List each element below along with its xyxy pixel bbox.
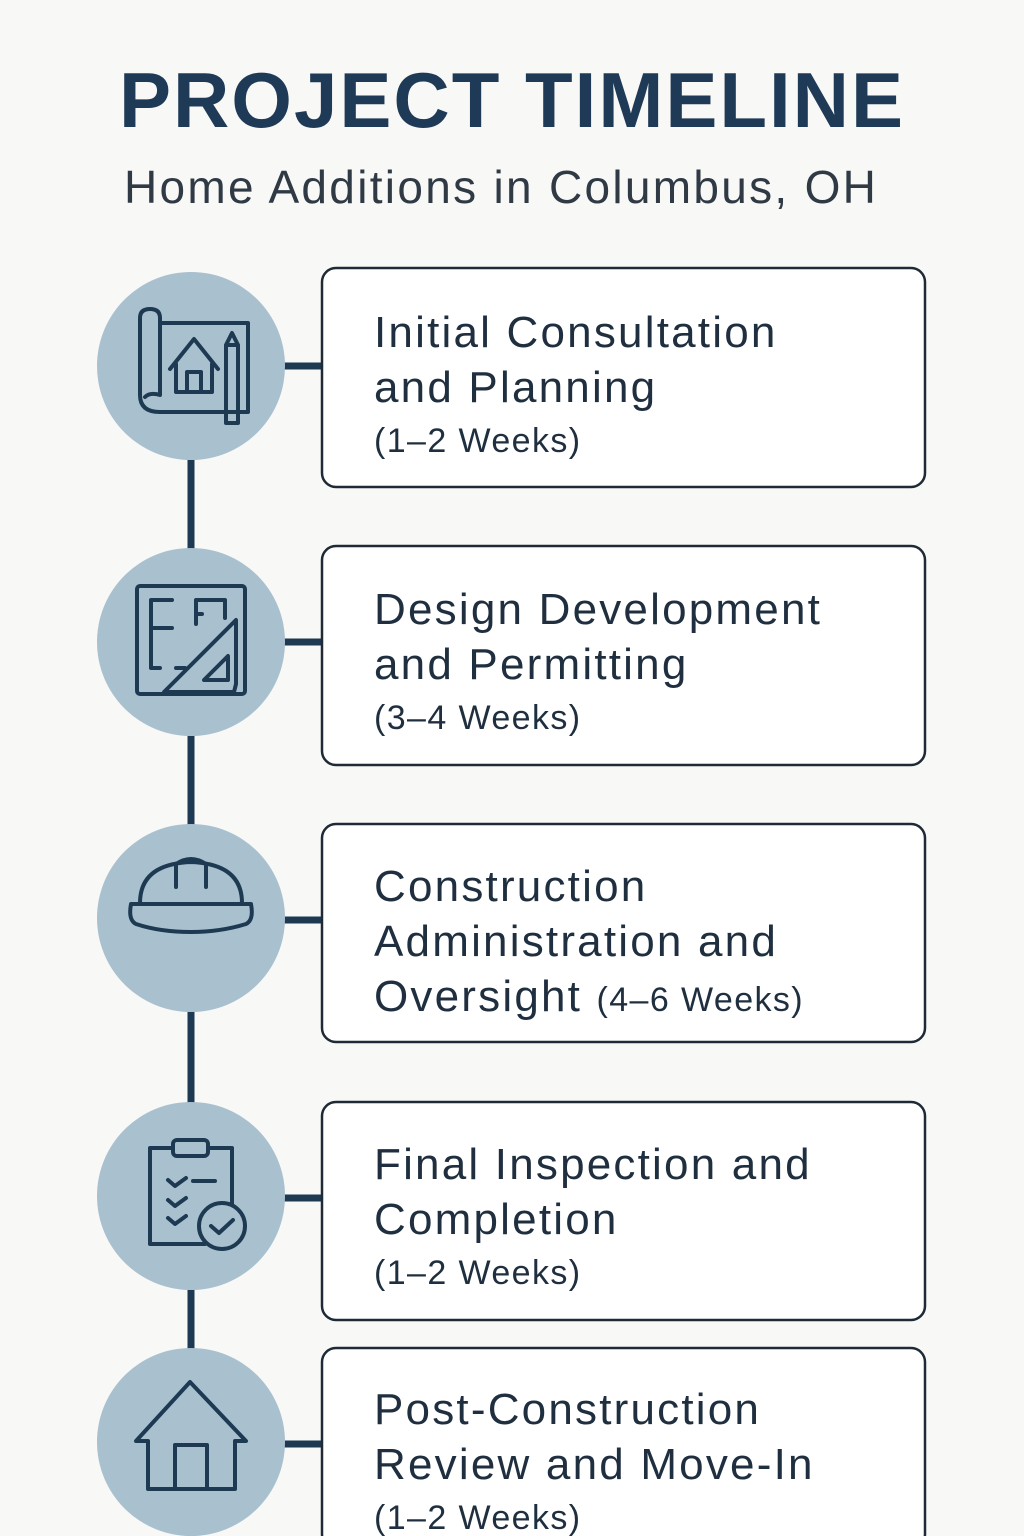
card: step 2: and Permitting: [374, 640, 689, 689]
card: step 1: and Planning: [374, 363, 657, 412]
card: step 1: [322, 268, 925, 487]
step 4: [97, 1102, 925, 1320]
step 5: [97, 1348, 925, 1536]
step 2: [97, 546, 925, 765]
card: step 2: [322, 546, 925, 765]
step 3: [97, 824, 925, 1042]
card: step 4: (1–2 Weeks): [374, 1254, 582, 1292]
card: step 2: Design Development: [374, 585, 822, 634]
timeline spine: [191, 366, 324, 1444]
card: step 5: Review and Move-In: [374, 1440, 815, 1489]
card: step 5: Post-Construction: [374, 1385, 761, 1434]
card: step 4: Final Inspection and: [374, 1140, 812, 1189]
card: step 4: [322, 1102, 925, 1320]
card: step 5: [322, 1348, 925, 1536]
card: step 1: (1–2 Weeks): [374, 422, 582, 460]
icon: blueprint: [97, 272, 285, 460]
card: step 3: Oversight (4–6 Weeks): [374, 972, 804, 1021]
card: step 4: Completion: [374, 1195, 619, 1244]
icon: house: [97, 1348, 285, 1536]
title: PROJECT TIMELINE: [119, 56, 905, 144]
card: step 3: [322, 824, 925, 1042]
card: step 2: (3–4 Weeks): [374, 699, 582, 737]
step 1: [97, 268, 925, 487]
card: step 3: Construction: [374, 862, 647, 911]
icon: checklist: [97, 1102, 285, 1290]
icon: hard hat: [97, 824, 285, 1012]
icon: floor plan: [97, 548, 285, 736]
card: step 1: Initial Consultation: [374, 308, 778, 357]
card: step 3: Administration and: [374, 917, 778, 966]
subtitle: Home Additions in Columbus, OH: [124, 161, 878, 213]
card: step 5: (1–2 Weeks): [374, 1499, 582, 1536]
